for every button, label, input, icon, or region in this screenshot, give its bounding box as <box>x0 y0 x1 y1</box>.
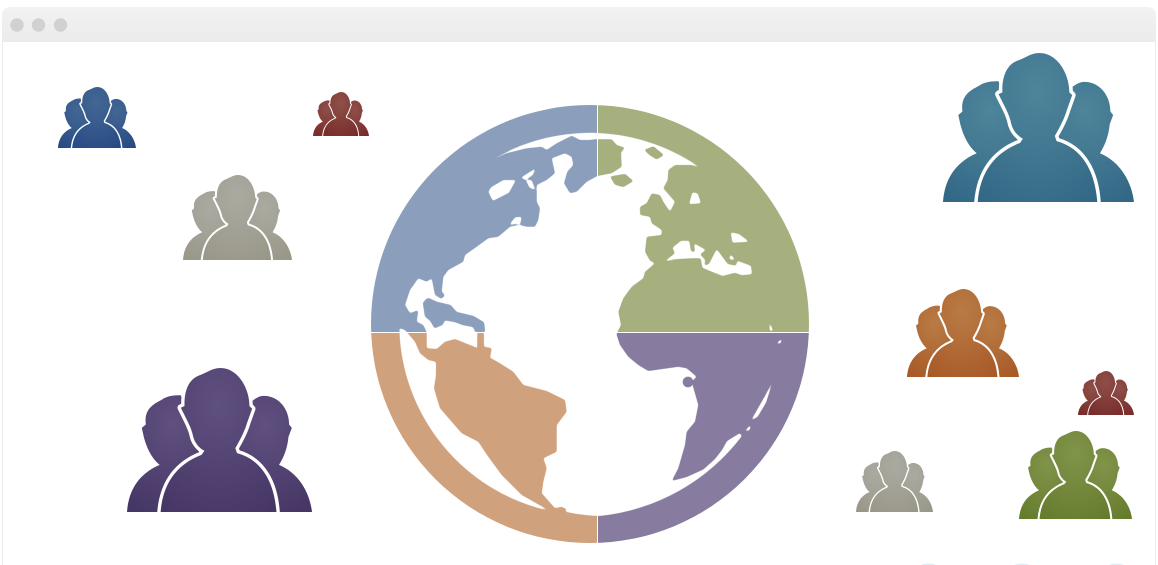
island: madagascar dot <box>682 376 694 388</box>
land islands <box>424 147 694 388</box>
icon: grey user group right <box>856 451 933 514</box>
window control dots <box>10 18 67 32</box>
icon: red user group top <box>313 92 369 138</box>
baltic sea <box>689 192 701 204</box>
oceans, seas and lakes <box>399 133 782 516</box>
icon: green user group <box>1019 431 1132 522</box>
black sea <box>731 232 749 243</box>
island: iceland and svalbard <box>611 147 663 187</box>
arctic sliver <box>495 143 536 158</box>
icon: teal user group <box>943 53 1134 207</box>
quadrant colours with ring and land <box>360 95 820 554</box>
mediterranean sea <box>664 241 752 276</box>
clipped icon tops at bottom edge <box>922 564 1124 565</box>
hudson bay <box>488 180 516 201</box>
browser title bar <box>2 7 1156 42</box>
icon: blue user group <box>58 87 136 150</box>
pacific ocean <box>399 328 550 511</box>
atlantic ocean <box>405 133 742 516</box>
icon: red user group right <box>1078 371 1134 417</box>
land bridge to south america <box>477 333 492 352</box>
icon: grey user group left <box>183 175 292 263</box>
island: caribbean <box>424 299 484 331</box>
globe <box>360 95 820 554</box>
icon: purple user group <box>127 368 312 517</box>
icon: orange user group <box>907 289 1019 380</box>
quadrant dividers <box>365 100 815 548</box>
